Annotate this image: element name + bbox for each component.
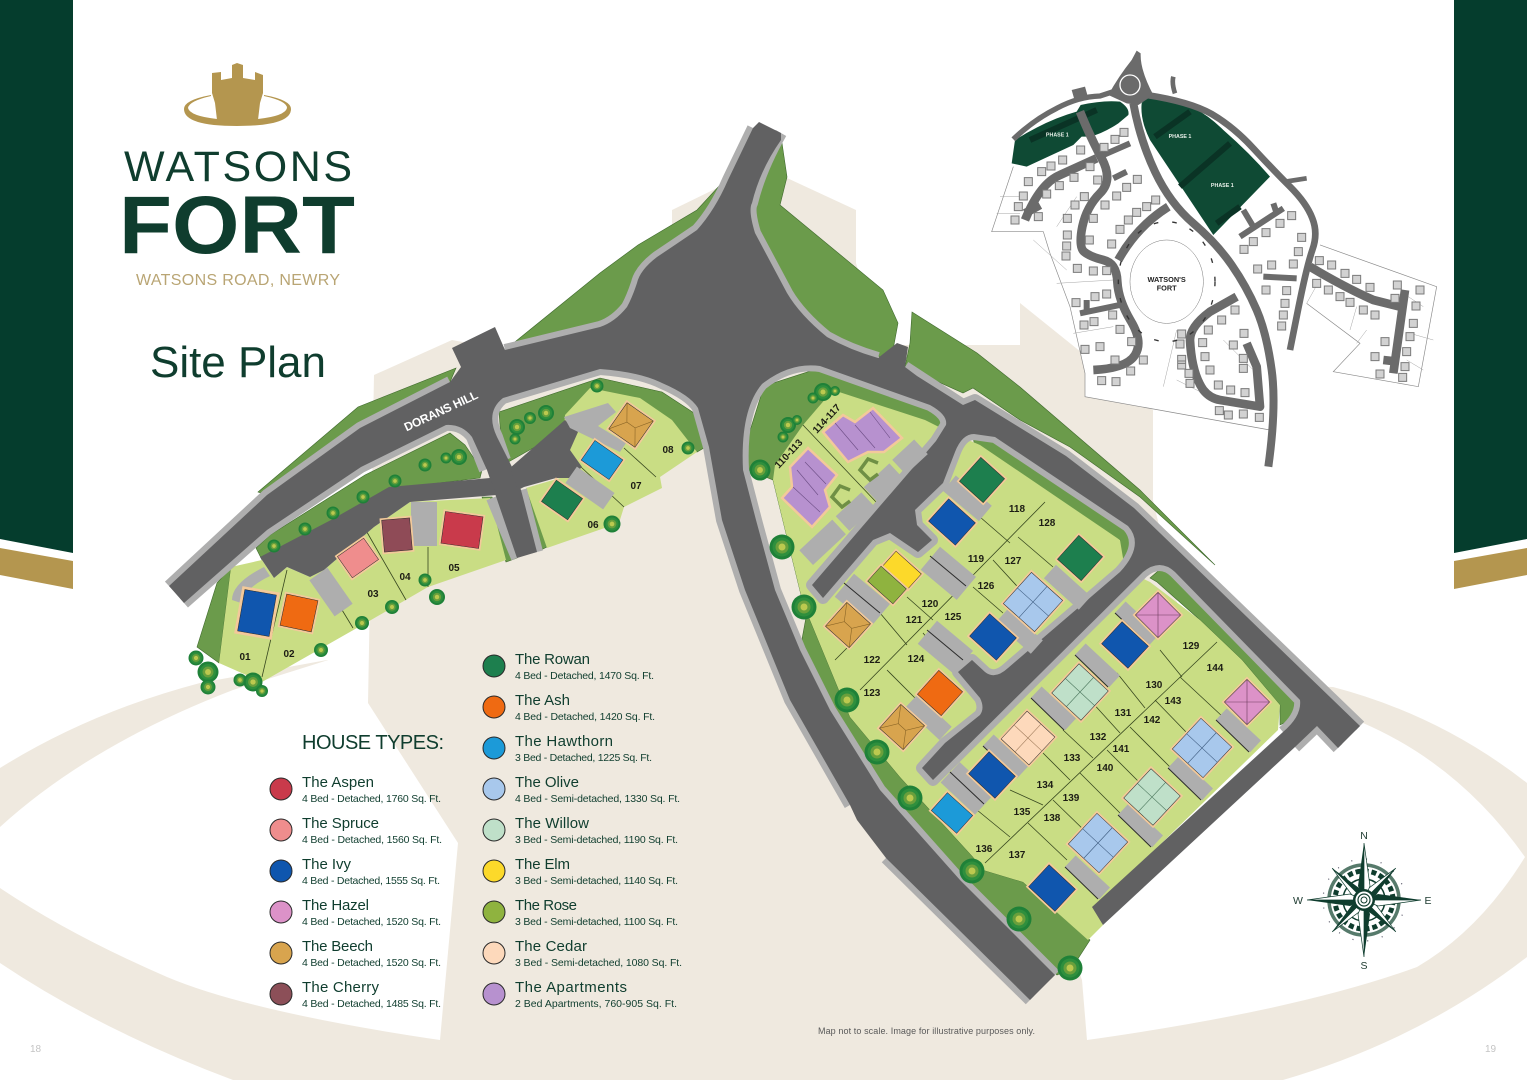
inset fort label: WATSON'S: [1148, 275, 1186, 284]
plot numbers: 04: [399, 572, 411, 583]
plot numbers: 144: [1207, 663, 1224, 674]
plot numbers: 119: [968, 554, 985, 565]
legend item: The Willow: [483, 815, 678, 846]
legend item: The Ivy: The Ivy: [302, 856, 352, 873]
plot numbers: 114-117: [811, 402, 844, 436]
compass ring: [1323, 859, 1405, 941]
inset houses: [1011, 128, 1424, 421]
compass letters: E: [1424, 895, 1432, 907]
compass letters: W: [1293, 895, 1303, 907]
legend item: The Hazel: [270, 897, 441, 928]
plot numbers: 122: [864, 655, 881, 666]
parking divider lines: [844, 556, 1249, 899]
house 03: The Spruce: [335, 535, 381, 581]
title: Site Plan: Site Plan: [150, 338, 326, 387]
plot numbers: 129: [1183, 641, 1200, 652]
inset fort label: [1148, 275, 1186, 293]
plot numbers: 03: [367, 589, 379, 600]
plot numbers: 06: [587, 520, 599, 531]
legend item: The Beech: The Beech: [302, 938, 373, 955]
driveways and parking: [232, 403, 1261, 899]
green verges: [197, 143, 1298, 975]
plot numbers: 118: [1009, 504, 1026, 515]
legend item: The Elm: [483, 856, 678, 887]
legend item: The Elm: 3 Bed - Semi-detached, 1140 Sq. Ft.: [515, 875, 678, 887]
inset phase labels: PHASE 1: [1046, 132, 1069, 138]
roundabout island: [667, 282, 749, 364]
road network: [169, 122, 1360, 1000]
legend item: The Aspen: The Aspen: [302, 774, 374, 791]
plot numbers: 124: [908, 654, 925, 665]
house 123: The Beech: [877, 702, 927, 752]
plot numbers: 126: [978, 581, 995, 592]
compass letters: N: [1360, 830, 1368, 842]
road name: Dorans Hill: DORANS HILL: [402, 388, 480, 434]
logo word: WATSONS: WATSONS: [124, 143, 352, 191]
house 130: The Ivy: [1099, 619, 1151, 671]
house 144: The Hazel: [1222, 677, 1272, 727]
legend item: The Hazel: The Hazel: [302, 897, 369, 914]
legend item: The Ivy: [270, 856, 440, 887]
plot numbers: 128: [1039, 518, 1056, 529]
apartments 114-117: [823, 408, 902, 462]
legend item: The Cedar: The Cedar: [515, 938, 587, 955]
house 137: The Ivy: [1026, 862, 1078, 914]
legend item: The Willow: 3 Bed - Semi-detached, 1190 Sq. Ft.: [515, 834, 678, 846]
page number 19: 19: [1485, 1044, 1497, 1055]
legend item: The Olive: The Olive: [515, 774, 579, 791]
service roads: [260, 420, 582, 578]
legend item: The Apartments: [483, 979, 677, 1010]
icon: castle tower with ring: [184, 63, 291, 126]
house 05: The Aspen: [439, 509, 485, 551]
logo word: FORT: FORT: [119, 180, 355, 271]
plot numbers: 135: [1014, 807, 1031, 818]
legend item: The Beech: 4 Bed - Detached, 1520 Sq. Ft.: [302, 957, 441, 969]
compass letters: S: [1360, 960, 1368, 972]
house 120: The Elm: [880, 548, 924, 592]
plot numbers: 139: [1063, 793, 1080, 804]
plot numbers: 05: [448, 563, 460, 574]
house 119: The Ivy: [926, 496, 978, 548]
legend item: The Ash: The Ash: [515, 692, 570, 709]
plot numbers: 137: [1009, 850, 1026, 861]
plot numbers: 127: [1005, 556, 1022, 567]
plot numbers: 131: [1115, 708, 1132, 719]
house 04: The Cherry: [379, 516, 415, 554]
legend item: The Rose: The Rose: [515, 897, 577, 914]
legend item: The Elm: The Elm: [515, 856, 570, 873]
legend item: The Beech: [270, 938, 441, 969]
inset fort label: FORT: [1157, 284, 1177, 293]
plot numbers: 120: [922, 599, 939, 610]
logo address: WATSONS ROAD, NEWRY: [136, 272, 340, 289]
legend item: The Cedar: 3 Bed - Semi-detached, 1080 Sq. Ft.: [515, 957, 682, 969]
inset lot lines: [997, 197, 1433, 393]
inset phase labels: [1046, 132, 1234, 189]
plot numbers: 07: [630, 481, 642, 492]
legend item: The Rose: 3 Bed - Semi-detached, 1100 Sq. Ft.: [515, 916, 678, 928]
legend item: The Olive: 4 Bed - Semi-detached, 1330 Sq. Ft.: [515, 793, 680, 805]
plot numbers: 132: [1090, 732, 1107, 743]
legend item: The Ivy: 4 Bed - Detached, 1555 Sq. Ft.: [302, 875, 440, 887]
plot numbers: 142: [1144, 715, 1161, 726]
houses 131-132: The Willow: [1049, 661, 1111, 723]
lawns and plots: [219, 388, 1280, 940]
house 06: The Rowan: [539, 477, 585, 523]
inset roundabout: [1072, 51, 1153, 105]
compass letters: [1293, 830, 1432, 972]
legend item: The Rowan: [483, 651, 654, 682]
inset phase labels: PHASE 1: [1169, 134, 1191, 140]
legend item: The Aspen: [270, 774, 441, 805]
compass star points: [1307, 843, 1421, 957]
legend item: The Cedar: [483, 938, 682, 969]
house 122: The Beech: [823, 600, 873, 650]
plot numbers: 141: [1113, 744, 1130, 755]
plot numbers: [239, 402, 1224, 861]
bin stores: [832, 459, 878, 507]
house 01: The Ivy: [234, 586, 280, 640]
plot numbers: 08: [662, 445, 674, 456]
legend item: The Cherry: 4 Bed - Detached, 1485 Sq. Ft.: [302, 998, 441, 1010]
plot numbers: 136: [976, 844, 993, 855]
legend item: The Hazel: 4 Bed - Detached, 1520 Sq. Ft.: [302, 916, 441, 928]
footnote: Map not to scale. Image for illustrative purposes only.: [818, 1026, 1035, 1036]
inset site outline: [992, 52, 1437, 430]
plot numbers: 125: [945, 612, 962, 623]
legend item: The Cherry: The Cherry: [302, 979, 380, 996]
house 124: The Ash: [915, 668, 965, 718]
legend item: The Cherry: [270, 979, 441, 1010]
inset phase 1 areas: [1012, 97, 1270, 235]
plot numbers: 138: [1044, 813, 1061, 824]
plot boundary lines: [262, 425, 1223, 863]
apartments 110-113: [782, 448, 837, 527]
house 135: The Ivy: [966, 749, 1018, 801]
houses 126-127: The Olive: [1001, 570, 1065, 634]
legend item: The Spruce: 4 Bed - Detached, 1560 Sq. Ft.: [302, 834, 442, 846]
right page side bar: [1454, 0, 1527, 589]
plot numbers: 133: [1064, 753, 1081, 764]
houses 133-134: The Cedar: [998, 708, 1058, 768]
legend item: The Hawthorn: [483, 733, 652, 764]
trees: [188, 380, 1082, 980]
houses 140-141: The Willow: [1121, 766, 1183, 828]
legend item: The Rose: [483, 897, 678, 928]
legend item: The Ash: [483, 692, 655, 723]
house 128: The Rowan: [1055, 533, 1105, 583]
plot numbers: 130: [1146, 680, 1163, 691]
logo: Watsons Fort: [119, 63, 355, 289]
legend item: The Rowan: The Rowan: [515, 651, 590, 668]
plot numbers: 01: [239, 652, 251, 663]
footpaths: [169, 128, 1360, 1000]
legend item: The Olive: [483, 774, 680, 805]
plot numbers: 143: [1165, 696, 1182, 707]
house 136: The Hawthorn: [929, 790, 975, 836]
house 02: The Ash: [278, 592, 320, 634]
legend item: The Hawthorn: 3 Bed - Detached, 1225 Sq. Ft.: [515, 752, 652, 764]
legend item: The Spruce: The Spruce: [302, 815, 379, 832]
compass rose: [1293, 830, 1432, 972]
house 129: The Hazel: [1133, 590, 1183, 640]
plot numbers: 02: [283, 649, 295, 660]
inset fort circle: [1118, 222, 1215, 342]
legend item: The Rowan: 4 Bed - Detached, 1470 Sq. Ft.: [515, 670, 654, 682]
plot numbers: 134: [1037, 780, 1054, 791]
houses 142-143: The Olive: [1169, 715, 1235, 781]
plot numbers: 110-113: [773, 437, 806, 471]
inset roads: [1013, 77, 1405, 467]
legend item: The Spruce: [270, 815, 442, 846]
house 07: The Hawthorn: [578, 438, 626, 482]
house 125: The Ivy: [967, 611, 1019, 663]
legend item: The Apartments: The Apartments: [515, 979, 627, 996]
plot numbers: 121: [906, 615, 923, 626]
left page side bar: [0, 0, 73, 589]
key map inset with phase 1: [992, 51, 1437, 467]
legend item: The Hawthorn: The Hawthorn: [515, 733, 613, 750]
house 08: The Beech: [606, 400, 656, 450]
legend: house types: [270, 651, 682, 1010]
plot numbers: 140: [1097, 763, 1114, 774]
site plan map: [169, 122, 1360, 1000]
legend item: The Willow: The Willow: [515, 815, 589, 832]
house 118: The Rowan: [957, 455, 1007, 505]
legend item: The Apartments: 2 Bed Apartments, 760-905 Sq. Ft.: [515, 998, 677, 1010]
legend heading: HOUSE TYPES:: [302, 732, 444, 754]
legend item: The Ash: 4 Bed - Detached, 1420 Sq. Ft.: [515, 711, 655, 723]
inset phase labels: PHASE 1: [1211, 183, 1234, 189]
plot numbers: 123: [864, 688, 881, 699]
legend item: The Aspen: 4 Bed - Detached, 1760 Sq. Ft.: [302, 793, 441, 805]
house 121: The Rose: [865, 563, 909, 607]
houses 138-139: The Olive: [1065, 810, 1131, 876]
page number 18: 18: [30, 1044, 42, 1055]
